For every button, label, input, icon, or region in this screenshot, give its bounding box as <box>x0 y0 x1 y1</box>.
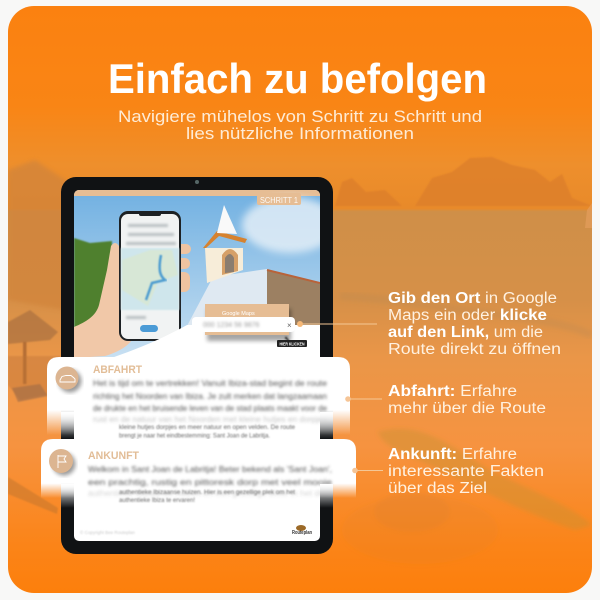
second paragraph strip <box>119 424 295 440</box>
notch <box>139 214 161 216</box>
blurred body text: authentieke Ibizaanse huizen en een gezellige sfeer in het dorp <box>88 489 333 498</box>
map route <box>146 255 165 300</box>
blurred body text: richting het Noorden van Ibiza. Je zult merken dat langzaamaan <box>93 392 327 401</box>
step badge: SCHRITT 1 <box>260 196 298 205</box>
connector: Abfahrt <box>345 396 382 402</box>
background: beach umbrella and loungers <box>8 310 60 514</box>
callout: Ankunft <box>388 446 544 497</box>
title: Einfach zu befolgen <box>108 55 487 102</box>
panel: Ankunft card <box>41 439 356 504</box>
click here button: HIER KLICKEN <box>280 342 304 346</box>
background: island rocks <box>335 157 592 206</box>
icon: car <box>56 366 82 392</box>
callout: Google Maps: Maps ein oder klicke <box>388 307 547 324</box>
second paragraph strip: authentieke Ibizaanse huizen. Hier is een gezellige plek om het <box>119 489 295 496</box>
white wall <box>187 269 267 326</box>
bell tower <box>205 248 243 283</box>
callout: Ankunft: über das Ziel <box>388 480 487 497</box>
hand holding phone <box>74 243 132 358</box>
red roof edge <box>267 270 320 283</box>
background: sailboat <box>585 203 592 228</box>
second paragraph strip <box>119 489 295 504</box>
icon: flag <box>49 449 76 476</box>
subtitle: lies nützliche Informationen <box>186 124 414 143</box>
background: waterline shadows <box>406 303 591 336</box>
tablet screen <box>74 190 320 541</box>
header bar <box>74 190 320 196</box>
blurred body text: de drukte en het bruisende leven van de stad plaats maakt voor de <box>93 404 328 413</box>
second paragraph strip: kleine hutjes dorpjes en meer natuur en open velden. De route <box>119 424 295 431</box>
callout: Google Maps: Route direkt zu öffnen <box>388 341 561 358</box>
tablet edge reflection under Abfahrt card <box>61 412 333 439</box>
logo <box>292 525 312 536</box>
callout: Abfahrt: mehr über die Route <box>388 400 546 417</box>
fingers <box>181 244 191 292</box>
google maps card: 000 1234 56 9876 <box>203 322 260 329</box>
callout: Abfahrt <box>388 383 546 417</box>
google maps card: × <box>287 321 292 330</box>
card background <box>47 357 350 435</box>
heading: ABFAHRT <box>93 364 142 376</box>
travel photo <box>74 196 338 358</box>
screen content <box>74 190 338 362</box>
callout: Google Maps: auf den Link, um die <box>388 324 543 341</box>
google maps card <box>192 304 295 341</box>
click here button <box>277 336 307 347</box>
subtitle <box>118 107 482 143</box>
click here button: ⬉ <box>284 336 290 343</box>
google maps card: Google Maps <box>222 311 255 317</box>
card background <box>41 439 356 498</box>
tablet <box>61 177 338 554</box>
callout: Google Maps: Gib den Ort in Google <box>388 290 557 307</box>
heading: ANKUNFT <box>88 450 139 462</box>
second paragraph strip: authentieke Ibiza te ervaren! <box>119 497 195 504</box>
blurred body text: een prachtig, rustig en pittoresk dorp met veel mooie <box>88 478 333 487</box>
panel: Abfahrt card <box>47 357 350 440</box>
phone <box>119 211 181 341</box>
subtitle: Navigiere mühelos von Schritt zu Schritt und <box>118 107 482 126</box>
logo: Routeplan <box>292 530 312 536</box>
screen footer copyright: © Copyright Bee Routeplan <box>80 529 135 535</box>
map land <box>122 250 178 306</box>
tower arch <box>222 249 238 275</box>
background: dune grass and sun hat <box>374 428 590 532</box>
blurred body text: Welkom in Sant Joan de Labritja! Beter bekend als 'Sant Joan', <box>88 465 332 474</box>
callout: Google Maps <box>388 290 561 358</box>
connector: Ankunft <box>352 468 383 473</box>
white curve under photo <box>114 325 320 357</box>
blurred body text: Het is tijd om te vertrekken! Vanuit Ibiza-stad begint de route <box>93 379 328 388</box>
connector: Google Maps <box>297 321 377 327</box>
blurred body text <box>93 379 328 424</box>
second paragraph strip: brengt je naar het eindbestemming: Sant Joan de Labritja. <box>119 432 270 440</box>
tablet edge reflection under Ankunft card <box>61 484 333 508</box>
background: left cliffs <box>8 160 66 308</box>
cloud <box>242 197 338 253</box>
step badge <box>257 193 301 205</box>
tower window <box>225 254 234 273</box>
tree <box>74 238 112 330</box>
tablet body <box>61 177 333 554</box>
start button <box>140 325 158 332</box>
callout: Ankunft: interessante Fakten <box>388 463 544 480</box>
spire <box>217 205 237 234</box>
map area <box>121 248 179 310</box>
callout: Ankunft: Ankunft: Erfahre <box>388 446 517 463</box>
blurred body text <box>88 465 333 498</box>
blurred body text: rust en de natuur van het Noorden met kleine hutjes en dorpjes <box>93 415 327 424</box>
tablet camera <box>195 180 199 184</box>
callout: Abfahrt: Abfahrt: Erfahre <box>388 383 517 400</box>
app lines <box>126 224 176 319</box>
tower cornice <box>203 231 247 248</box>
stone wall <box>267 270 320 330</box>
